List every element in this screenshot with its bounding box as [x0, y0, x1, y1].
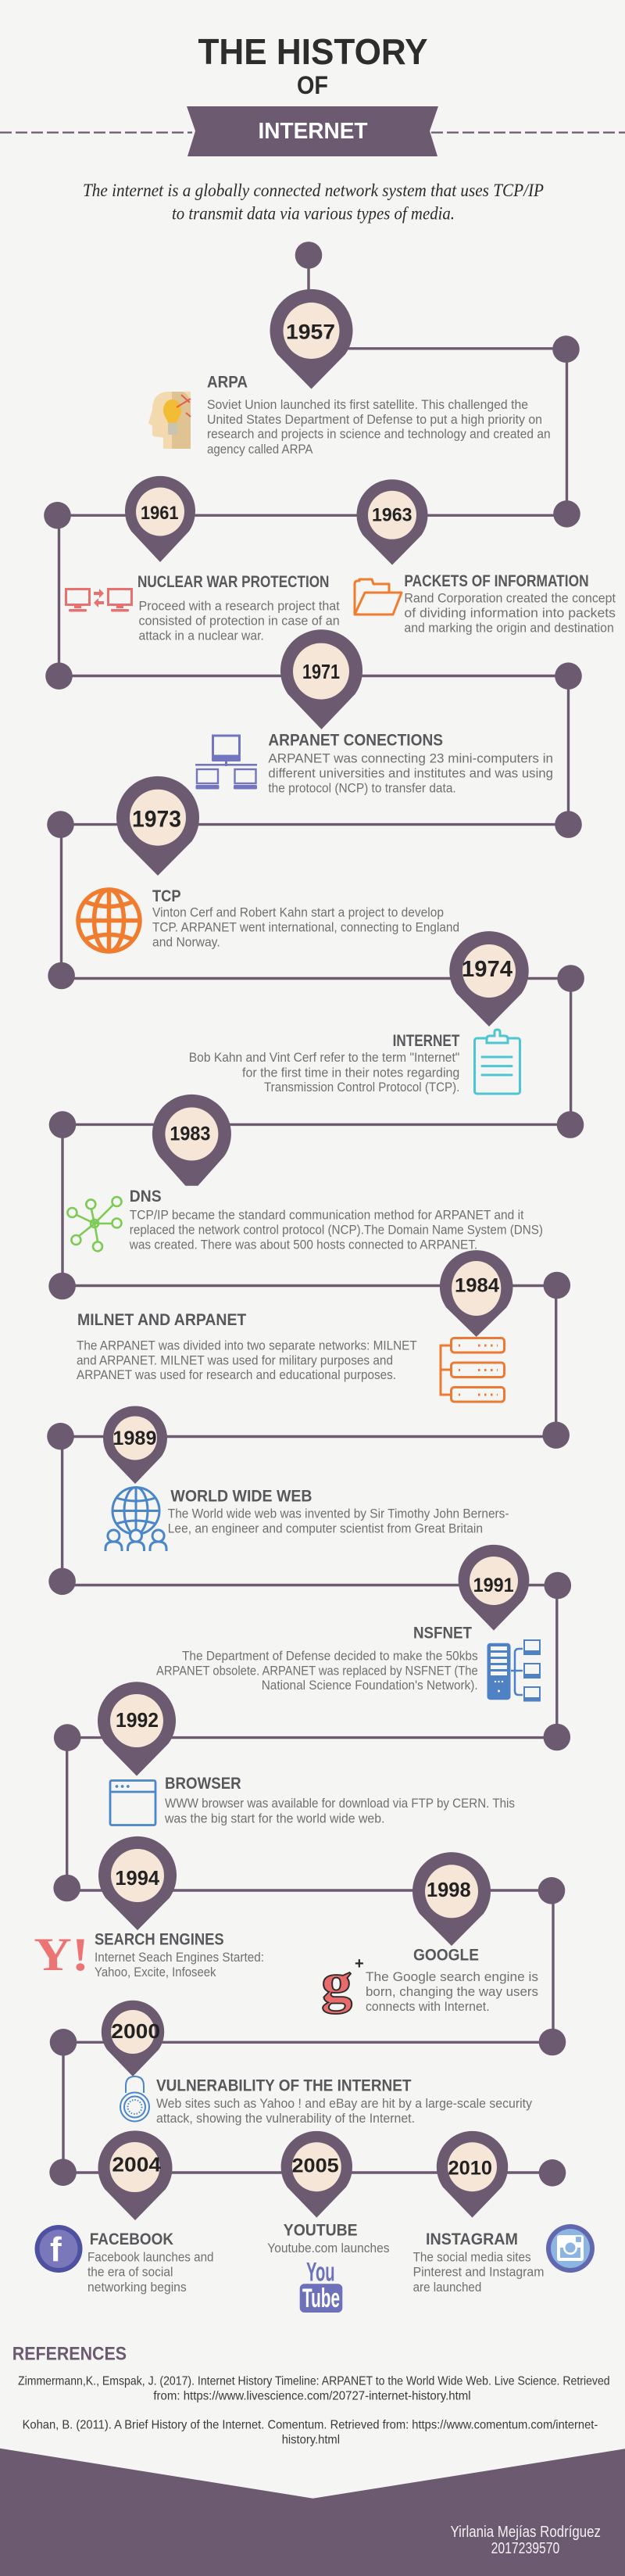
text: Browser description — [164, 1797, 515, 1826]
event: 1998 Google — [321, 1852, 538, 2014]
text: ARPA description: agency called ARPA — [207, 442, 312, 457]
pin 1974: 1974 — [462, 957, 512, 982]
text: WWW description: The World wide web was invented by Sir Timothy John Berners- — [168, 1507, 509, 1521]
icon: Google plus — [321, 1951, 364, 2014]
heading: Facebook: FACEBOOK — [90, 2230, 173, 2248]
pin 2005 — [281, 2131, 352, 2218]
event: 1994 Search engines — [34, 1836, 264, 1980]
text: TCP description — [152, 905, 459, 949]
pin 1961 — [125, 476, 195, 562]
text: DNS description: TCP/IP became the standard communication method for ARPANET and it — [130, 1209, 524, 1223]
pin 1963 — [356, 479, 428, 565]
text: Internet description: Bob Kahn and Vint Cerf refer to the term "Internet" — [189, 1051, 459, 1065]
pin 1983 — [152, 1095, 231, 1186]
text: Instagram description: Pinterest and Instagram — [413, 2266, 544, 2280]
icon: Google plus: g — [321, 1951, 352, 2014]
text: Internet description: Transmission Control Protocol (TCP). — [264, 1080, 459, 1095]
heading: YouTube: YOUTUBE — [284, 2221, 358, 2239]
dashed line beside ribbon — [0, 131, 625, 134]
text: Nuclear description: Proceed with a research project that — [139, 599, 340, 613]
pin 2004: 2004 — [112, 2152, 162, 2176]
icon: green network nodes — [67, 1197, 122, 1251]
event: 1963 Packets of information — [355, 479, 616, 635]
icon: YouTube logo: Tube — [302, 2284, 340, 2313]
pin 2010 — [437, 2131, 508, 2218]
icon: Facebook — [34, 2225, 83, 2273]
pin 1991: 1991 — [473, 1575, 514, 1596]
icon: browser window — [110, 1781, 155, 1825]
pin 1974 — [449, 931, 529, 1026]
text: MILNET description — [77, 1338, 417, 1382]
text: DNS description — [129, 1209, 543, 1252]
event: 1974 Internet — [189, 931, 529, 1095]
text: NSFNET description: National Science Foundation's Network). — [262, 1679, 478, 1693]
pin 2010: 2010 — [448, 2158, 492, 2180]
pin 1992 — [98, 1682, 176, 1776]
pin 1957: 1957 — [286, 321, 335, 344]
heading: MILNET and ARPANET: MILNET AND ARPANET — [77, 1311, 246, 1329]
text: ARPA description: United States Department of Defense to put a high priority on — [207, 413, 542, 427]
text: TCP description: and Norway. — [152, 935, 220, 949]
text: Nuclear description: attack in a nuclear war. — [139, 629, 264, 643]
text: Instagram description — [413, 2251, 544, 2295]
text: WWW description — [168, 1507, 509, 1535]
pin 1984: 1984 — [455, 1274, 499, 1296]
text: NSFNET description — [156, 1650, 478, 1693]
text: Search engines description — [95, 1951, 264, 1979]
pin 1989 — [103, 1406, 167, 1484]
text: Internet description — [189, 1051, 459, 1095]
text: Browser description: WWW browser was available for download via FTP by CERN. This — [165, 1797, 515, 1811]
heading: Browser: BROWSER — [165, 1775, 241, 1793]
title: THE HISTORY — [198, 31, 428, 72]
event: 2010 Instagram — [413, 2131, 595, 2295]
text: MILNET description: ARPANET was used for research and educational purposes. — [77, 1368, 396, 1382]
text: TCP description: TCP. ARPANET went international, connecting to England — [152, 920, 459, 934]
text: DNS description: replaced the network control protocol (NCP).The Domain Name System (DNS) — [130, 1223, 543, 1237]
ribbon: INTERNET — [187, 106, 438, 156]
icon: head with light bulb — [148, 392, 191, 449]
event: 2004 Facebook — [34, 2130, 214, 2295]
event: 2000 Vulnerability — [102, 2001, 533, 2126]
title — [198, 31, 428, 99]
heading: World Wide Web: WORLD WIDE WEB — [170, 1488, 312, 1506]
icon: computer network — [195, 736, 257, 790]
text: MILNET description: The ARPANET was divided into two separate networks: MILNET — [77, 1338, 417, 1352]
text: WWW description: Lee, an engineer and computer scientist from Great Britain — [168, 1521, 483, 1535]
text: Packets description: and marking the origin and destination — [404, 621, 614, 635]
heading: ARPANET conections: ARPANET CONECTIONS — [268, 732, 443, 749]
text: Search engines description: Yahoo, Excite, Infoseek — [95, 1965, 216, 1979]
ribbon: INTERNET: INTERNET — [258, 119, 368, 144]
text: Packets description: Rand Corporation created the concept — [404, 592, 616, 606]
text: Instagram description: The social media sites — [413, 2251, 531, 2265]
event: 1971 ARPANET connections — [195, 629, 553, 796]
icon: globe with people — [105, 1487, 166, 1551]
pin 1963: 1963 — [372, 505, 412, 525]
icon: clipboard — [475, 1030, 520, 1094]
text: Facebook description: networking begins — [88, 2280, 187, 2295]
pin 1971: 1971 — [302, 660, 340, 683]
icon: YouTube logo: You — [306, 2258, 335, 2288]
pin 1998: 1998 — [427, 1878, 471, 1901]
pin 1957 — [270, 289, 353, 389]
pin 1991 — [459, 1545, 529, 1631]
text: reference 1 — [18, 2375, 610, 2403]
heading: Nuclear war protection: NUCLEAR WAR PROTECTION — [138, 573, 329, 591]
pin 2000: 2000 — [111, 2019, 160, 2043]
event: 1992 Browser — [98, 1682, 515, 1826]
event: 1973 TCP — [78, 776, 459, 951]
pin 1994 — [98, 1836, 177, 1930]
event: 1957 ARPA — [148, 289, 551, 457]
text: Facebook description: Facebook launches and — [88, 2251, 214, 2265]
text: Packets description: of dividing information into packets — [404, 606, 616, 620]
event: 1989 World Wide Web — [103, 1406, 509, 1551]
text: Browser description: was the big start for the world wide web. — [164, 1812, 384, 1826]
intro text: The internet is a globally connected network system that uses TCP/IP — [83, 181, 544, 200]
icon: Google plus: + — [355, 1955, 364, 1972]
heading: References: REFERENCES — [12, 2343, 127, 2364]
icon: Instagram — [546, 2224, 595, 2273]
event: 2005 YouTube — [267, 2131, 389, 2313]
intro text — [83, 181, 544, 224]
icon: orange globe — [78, 890, 140, 951]
icon: padlock — [120, 2076, 149, 2122]
text: Facebook description — [88, 2251, 214, 2295]
text: DNS description: was created. There was about 500 hosts connected to ARPANET. — [129, 1238, 477, 1252]
heading: Instagram: INSTAGRAM — [426, 2230, 518, 2248]
pin 1973: 1973 — [132, 807, 181, 833]
text: TCP description: Vinton Cerf and Robert Kahn start a project to develop — [152, 905, 444, 919]
intro text: to transmit data via various types of media. — [172, 203, 455, 224]
text: Search engines description: Internet Seach Engines Started: — [95, 1951, 264, 1965]
pin 1973 — [116, 776, 199, 876]
text: Instagram description: are launched — [413, 2280, 481, 2295]
footer panel — [0, 2449, 625, 2576]
heading: TCP: TCP — [152, 887, 181, 905]
text: reference 2: history.html — [282, 2434, 340, 2447]
pin 1971 — [280, 629, 362, 729]
icon: folder — [355, 579, 402, 614]
heading: NSFNET: NSFNET — [413, 1625, 472, 1642]
icon: Yahoo logo: Y! — [34, 1929, 89, 1980]
text: ARPANET description: the protocol (NCP) to transfer data. — [268, 782, 456, 796]
timeline connector path — [44, 242, 584, 2187]
text: Google description: born, changing the way users — [366, 1985, 538, 1999]
text: reference 2 — [23, 2419, 598, 2447]
event: 1984 MILNET and ARPANET — [77, 1250, 512, 1402]
pin 2005: 2005 — [292, 2155, 339, 2177]
heading: Google: GOOGLE — [413, 1946, 479, 1964]
text: ARPANET description: ARPANET was connecting 23 mini-computers in — [268, 751, 553, 765]
event: 1983 DNS — [67, 1095, 543, 1252]
pin 1983: 1983 — [170, 1123, 210, 1145]
pin 1984 — [440, 1250, 512, 1337]
icon: YouTube logo — [300, 2258, 342, 2313]
text: YouTube description: Youtube.com launches — [267, 2241, 389, 2255]
pin 1992: 1992 — [116, 1708, 159, 1732]
text: ARPANET description — [268, 751, 553, 796]
text: ARPA description: research and projects in science and technology and created an — [207, 428, 551, 442]
text: Facebook description: the era of social — [88, 2266, 173, 2280]
text: author: Yirlania Mejías Rodríguez — [450, 2524, 601, 2541]
icon: Facebook: f — [50, 2230, 62, 2269]
text: ARPA description: Soviet Union launched its first satellite. This challenged the — [207, 398, 528, 412]
text: Google description: connects with Internet. — [366, 2000, 490, 2014]
text: ARPANET description: different universities and institutes and was using — [268, 766, 553, 780]
event: 1961 Nuclear war protection — [66, 476, 340, 643]
text: Nuclear description: consisted of protection in case of an — [139, 614, 340, 629]
text: author: 2017239570 — [491, 2540, 559, 2557]
text: author — [450, 2524, 601, 2557]
heading: Search engines: SEARCH ENGINES — [95, 1931, 224, 1949]
text: NSFNET description: ARPANET obsolete. ARPANET was replaced by NSFNET (The — [156, 1664, 478, 1679]
text: reference 1: from: https://www.livescience.com/20727-internet-history.html — [153, 2390, 471, 2403]
text: NSFNET description: The Department of Defense decided to make the 50kbs — [182, 1650, 478, 1664]
title: OF — [297, 71, 328, 99]
pin 1989: 1989 — [112, 1428, 156, 1449]
text: Google description: The Google search engine is — [366, 1970, 538, 1984]
text: Packets description — [404, 592, 616, 635]
pin 1994: 1994 — [115, 1866, 160, 1890]
icon: server tower with computers — [488, 1640, 541, 1701]
event: 1991 NSFNET — [156, 1545, 541, 1701]
heading: Vulnerability: VULNERABILITY OF THE INTERNET — [156, 2076, 412, 2094]
pin 2000 — [102, 2001, 164, 2076]
pin 1961: 1961 — [141, 503, 178, 524]
text: Google description — [366, 1970, 538, 2014]
pin 2004 — [98, 2130, 172, 2220]
text: ARPA description — [207, 398, 551, 457]
icon: two monitors with arrows — [66, 589, 131, 611]
heading: Packets of information: PACKETS OF INFORMATION — [404, 572, 589, 590]
text: Vulnerability description — [156, 2097, 533, 2126]
text: Internet description: for the first time in their notes regarding — [242, 1066, 459, 1080]
text: MILNET description: and ARPANET. MILNET was used for military purposes and — [77, 1354, 393, 1368]
heading: ARPA: ARPA — [207, 374, 248, 392]
text: Vulnerability description: Web sites such as Yahoo ! and eBay are hit by a large-scale security — [156, 2097, 533, 2111]
icon: orange server rack — [441, 1338, 505, 1402]
heading: Internet: INTERNET — [393, 1032, 459, 1050]
text: Vulnerability description: attack, showing the vulnerability of the Internet. — [156, 2112, 415, 2126]
heading: DNS: DNS — [130, 1188, 162, 1206]
pin 1998 — [412, 1852, 491, 1946]
text: Nuclear description — [139, 599, 340, 643]
